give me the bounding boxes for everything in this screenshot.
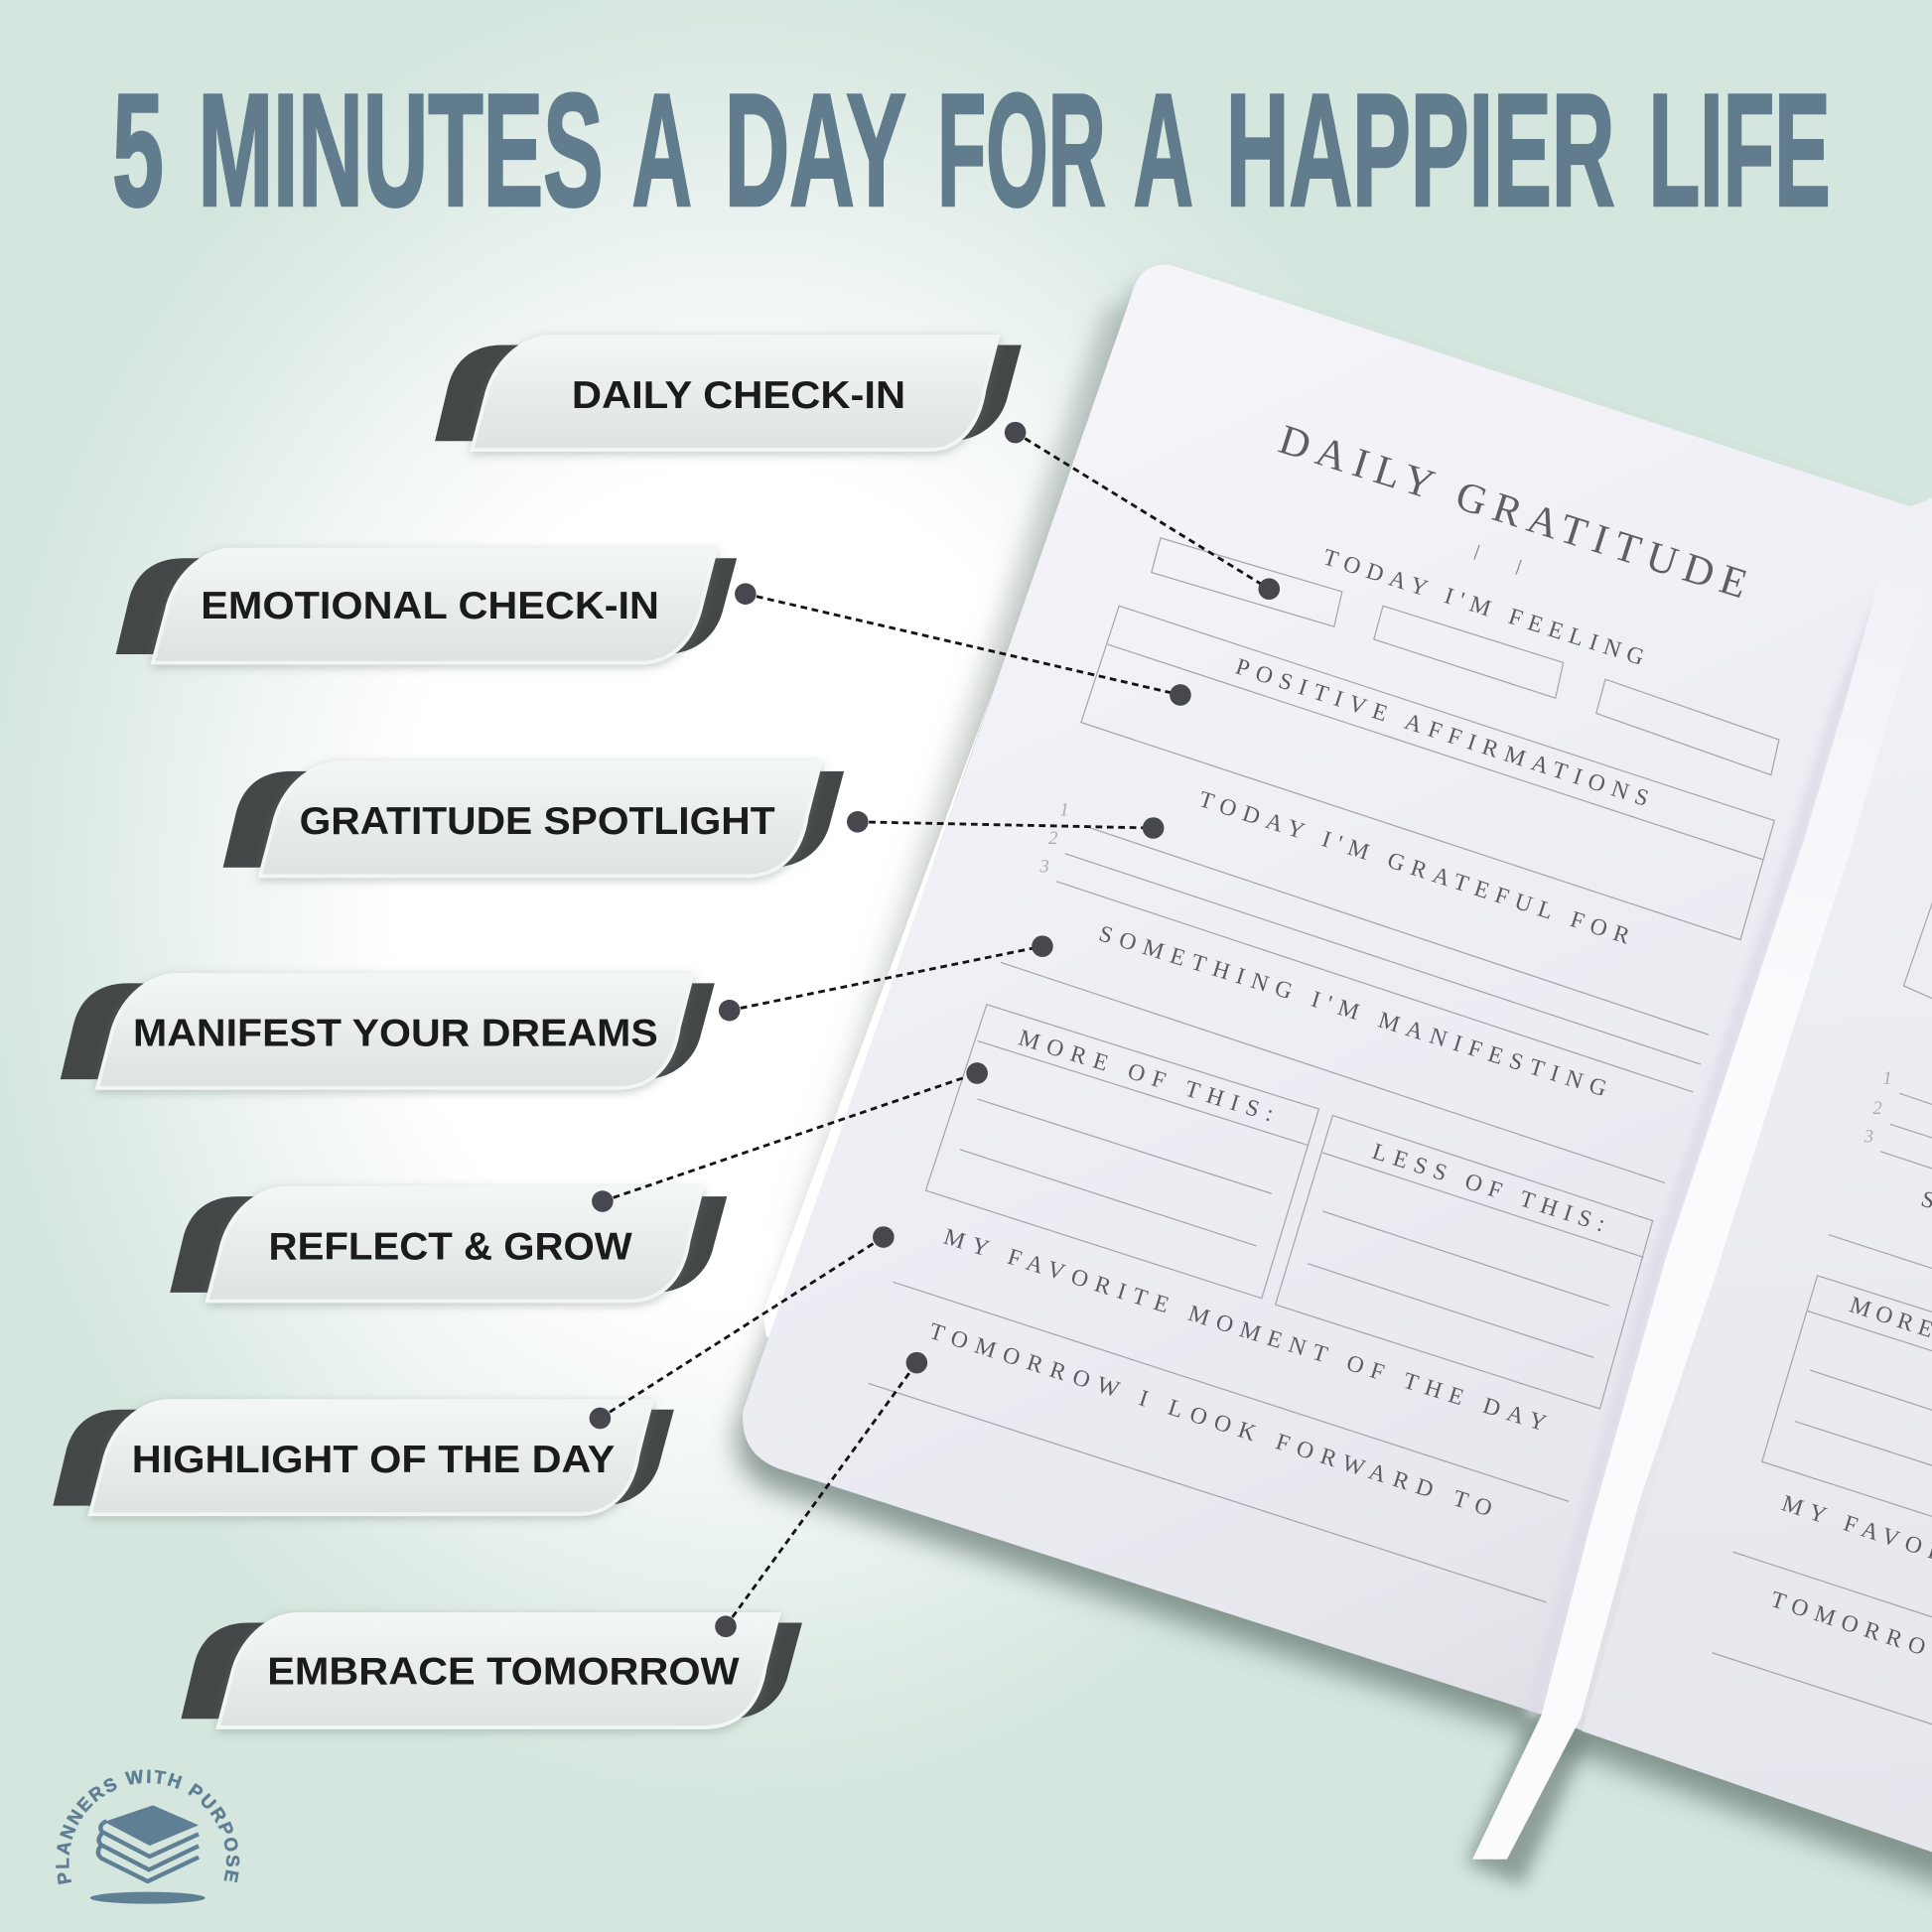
connector: manifest your dreams bbox=[719, 935, 1053, 1021]
right page contents: 1 bbox=[1882, 1068, 1892, 1089]
date slashes: / bbox=[1516, 554, 1523, 579]
connector: embrace tomorrow bbox=[715, 1352, 927, 1637]
section: positive affirmations: POSITIVE AFFIRMATIONS bbox=[1232, 654, 1652, 812]
label: daily check-in: DAILY CHECK-IN bbox=[572, 374, 905, 417]
label: daily check-in bbox=[435, 337, 1022, 450]
logo: planners with purpose: PLANNERS WITH PURPOSE bbox=[56, 1769, 240, 1884]
section: today i'm feeling bbox=[1152, 538, 1779, 775]
title: FOR bbox=[937, 62, 1106, 240]
label: emotional check-in: EMOTIONAL CHECK-IN bbox=[201, 585, 659, 627]
section: today i'm grateful for: 2 bbox=[1048, 828, 1057, 849]
title: HAPPIER bbox=[1226, 62, 1614, 240]
label: gratitude spotlight: GRATITUDE SPOTLIGHT bbox=[300, 800, 775, 843]
date slashes bbox=[1473, 539, 1523, 579]
connector: emotional check-in bbox=[735, 583, 1191, 706]
planner book bbox=[737, 264, 1932, 1894]
ribbon shadow bbox=[1466, 1725, 1589, 1885]
section: today i'm grateful for: 3 bbox=[1038, 857, 1049, 878]
title: DAY bbox=[725, 62, 906, 240]
label: embrace tomorrow bbox=[181, 1614, 802, 1727]
title: 5 bbox=[112, 62, 164, 240]
connector: gratitude spotlight bbox=[847, 811, 1164, 839]
section: today i'm grateful for: 1 bbox=[1059, 800, 1069, 821]
section: positive affirmations bbox=[1081, 606, 1774, 940]
label: gratitude spotlight bbox=[223, 762, 844, 876]
label: manifest your dreams bbox=[61, 975, 715, 1088]
book shadow bbox=[737, 286, 1932, 1894]
section: today i'm feeling: TODAY I'M FEELING bbox=[1319, 544, 1647, 671]
gutter shadow bbox=[1532, 604, 1880, 1716]
right page contents: 2 bbox=[1872, 1098, 1882, 1119]
right page bbox=[1583, 579, 1932, 1852]
label: emotional check-in bbox=[116, 550, 737, 663]
connector: daily check-in bbox=[1005, 422, 1280, 600]
date slashes: / bbox=[1473, 539, 1480, 564]
label: manifest your dreams: MANIFEST YOUR DREAMS bbox=[133, 1013, 658, 1055]
label: reflect & grow bbox=[170, 1187, 727, 1302]
label: highlight of the day: HIGHLIGHT OF THE DAY bbox=[132, 1439, 616, 1481]
title bbox=[112, 62, 1831, 240]
box: less of this: LESS OF THIS: bbox=[1369, 1139, 1608, 1237]
box: more of this: MORE OF THIS: bbox=[1016, 1026, 1277, 1127]
left page bbox=[743, 264, 1932, 1852]
section: something i'm manifesting bbox=[1001, 920, 1665, 1182]
section: today i'm grateful for: TODAY I'M GRATEFUL FOR bbox=[1195, 786, 1633, 950]
left edge shadow bbox=[788, 308, 1115, 1232]
section: tomorrow i look forward to bbox=[869, 1318, 1547, 1602]
section: tomorrow i look forward to: TOMORROW I LOOK FORWARD TO bbox=[926, 1318, 1495, 1522]
label: embrace tomorrow: EMBRACE TOMORROW bbox=[267, 1651, 740, 1694]
box: less of this bbox=[1276, 1115, 1653, 1409]
title: A bbox=[632, 62, 692, 240]
section: my favorite moment of the day: MY FAVORITE MOMENT OF THE DAY bbox=[941, 1224, 1549, 1437]
label: reflect & grow: REFLECT & GROW bbox=[269, 1225, 632, 1268]
section: my favorite moment of the day bbox=[893, 1224, 1569, 1501]
white cover edge bbox=[762, 690, 993, 1337]
right page contents bbox=[1713, 890, 1932, 1725]
title: MINUTES bbox=[199, 62, 604, 240]
heading: daily gratitude: DAILY GRATITUDE bbox=[1274, 416, 1752, 608]
section: today i'm grateful for bbox=[1038, 786, 1709, 1092]
connector: reflect and grow bbox=[592, 1062, 988, 1212]
bookmark ribbon bbox=[1472, 497, 1932, 1860]
box: more of this bbox=[925, 1005, 1318, 1299]
title: A bbox=[1134, 62, 1193, 240]
right page contents: 3 bbox=[1863, 1126, 1873, 1147]
label: highlight of the day bbox=[53, 1401, 674, 1514]
section: something i'm manifesting: SOMETHING I'M MANIFESTING bbox=[1096, 920, 1609, 1102]
connector: highlight of the day bbox=[590, 1226, 895, 1429]
